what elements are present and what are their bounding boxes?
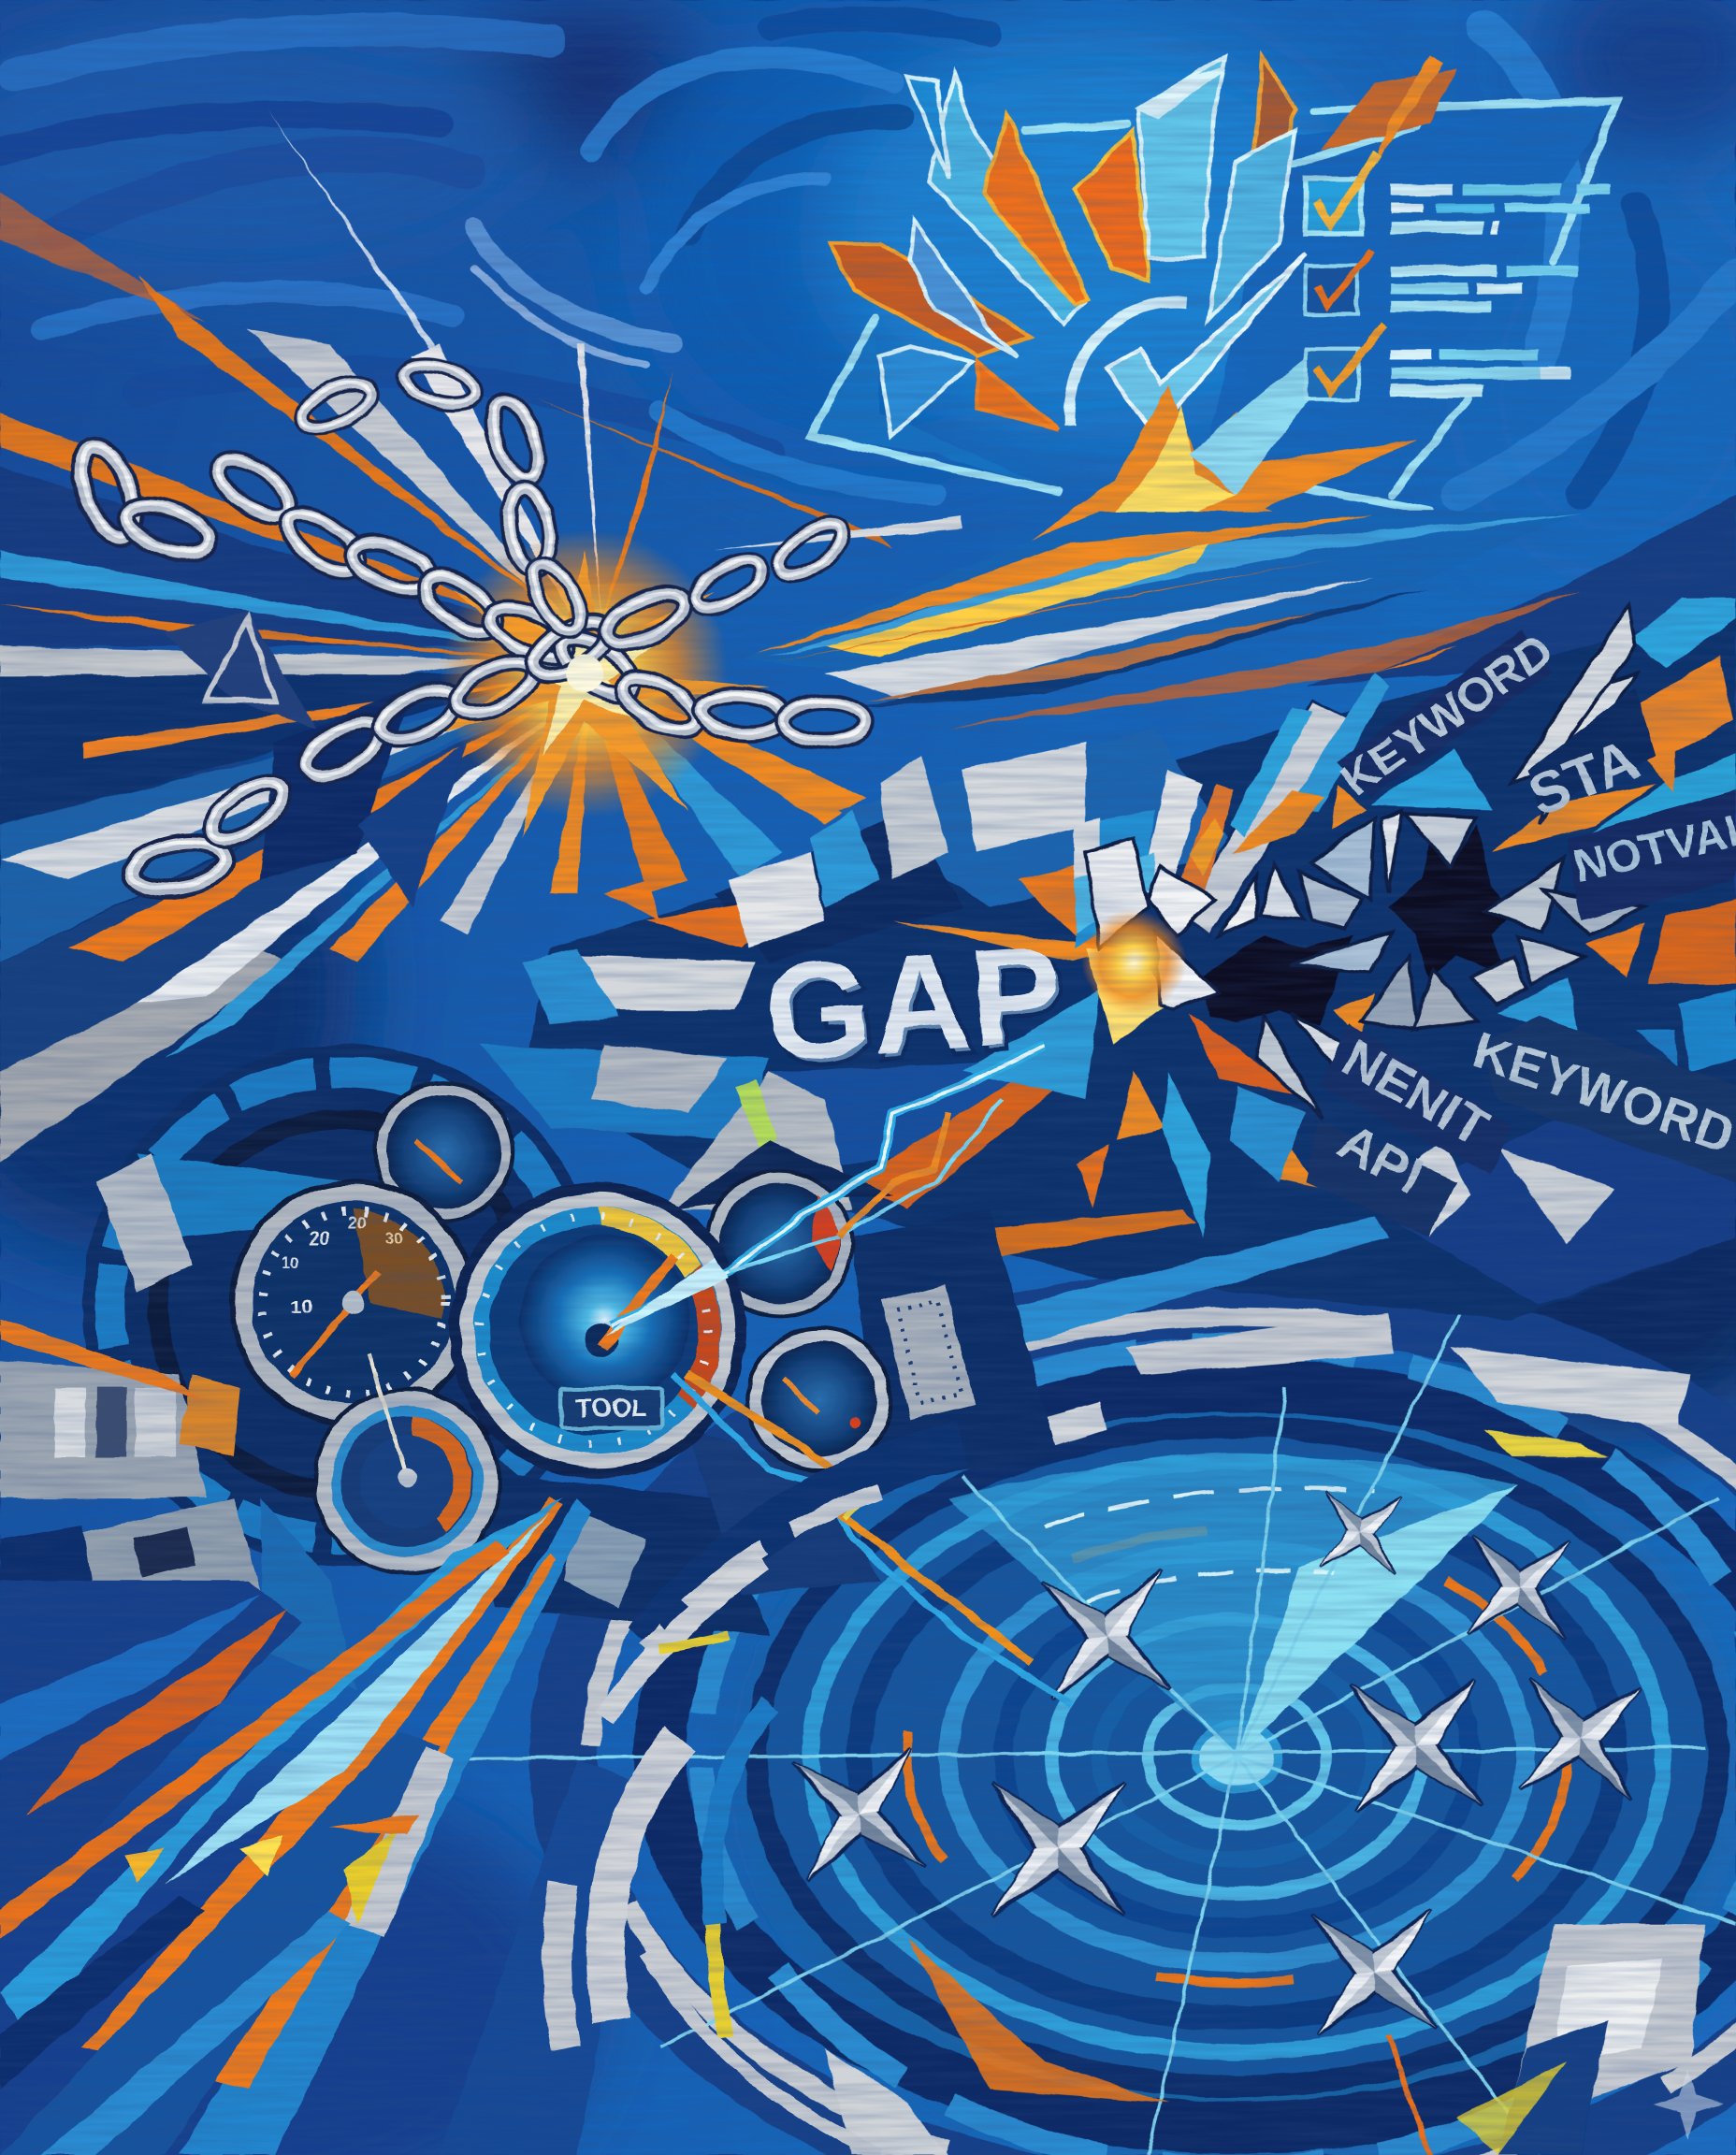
gauge: central TOOL speedometer [450, 1182, 746, 1479]
left radiating streaks [0, 110, 962, 1162]
radar outer rings [564, 1303, 1736, 2155]
lower left light rays [0, 1498, 646, 2155]
explosion glow at chain break [412, 529, 770, 838]
banner: keyword upper: KEYWORD [1331, 624, 1561, 806]
shuriken 3 [1421, 1490, 1616, 1685]
lightning from gauge to gap [605, 1045, 1072, 1704]
gauge: left large: 30 [384, 1229, 403, 1248]
banner: STA [1520, 687, 1656, 829]
shuriken 1 [1284, 1455, 1438, 1609]
mid shatter band base [481, 605, 1736, 1353]
banner: API: API [1328, 1111, 1433, 1206]
burst at clipboard base [1017, 357, 1417, 550]
banner: NOTVAL [1567, 790, 1736, 920]
black holes [1203, 825, 1513, 1025]
banner: API [1306, 1111, 1457, 1237]
curved gray bands around radar [557, 1443, 962, 2155]
GAP lettering: GAP [760, 918, 1067, 1092]
crystal shards [831, 55, 1457, 436]
radar spokes [384, 1292, 1736, 2155]
radar gray arc blocks [825, 1312, 1704, 2155]
chain: upper left to center [69, 438, 866, 741]
arc and large check mark [1069, 253, 1306, 436]
chain: lower left to center [126, 513, 851, 896]
shuriken 5 [1469, 1627, 1692, 1850]
spiky shards radiating upward [1075, 646, 1457, 1045]
radar [384, 1292, 1736, 2155]
gauge: left large: 20 [310, 1229, 329, 1249]
explosion core [565, 654, 603, 693]
checkbox 1 [1306, 154, 1377, 234]
shuriken 8 [1256, 1854, 1494, 2091]
checklist text lines [1391, 184, 1611, 398]
blue and orange fragments [1077, 598, 1736, 1306]
shuriken 7 [925, 1715, 1192, 1981]
shattered glass cluster [1077, 598, 1736, 1306]
chains [69, 357, 866, 896]
checkbox 2 [1306, 250, 1372, 314]
gauge: upper right small [706, 1171, 852, 1317]
gauge: lower right small [747, 1327, 890, 1470]
banner: keyword lower: KEYWORD [1466, 1020, 1736, 1164]
TOOL label: TOOL [575, 1394, 647, 1423]
watermark sparkle [1652, 2068, 1724, 2140]
shuriken 6 [741, 1696, 977, 1932]
TOOL label [561, 1388, 662, 1428]
GAP lettering: GAP [764, 922, 1072, 1096]
dashboard mechanical surround [0, 1045, 1059, 1704]
shuriken 4 [1290, 1620, 1541, 1872]
checkbox 3 [1306, 325, 1385, 398]
banner: STA: STA [1520, 727, 1647, 829]
gauge: left large: 10 [282, 1253, 300, 1272]
gauge: left large: 10 [292, 1295, 312, 1317]
banner: NENIT: NENIT [1334, 1028, 1498, 1157]
gauge: left large: 20 [348, 1212, 367, 1231]
radar sweep wedge [948, 1456, 1519, 1757]
gauge: left large [232, 1182, 474, 1424]
clipboard panel outline [811, 99, 1616, 512]
clipboard checklist with crystals [811, 55, 1616, 550]
radar disc rings [756, 1426, 1718, 2087]
glow at gap impact [1082, 910, 1186, 1014]
silver shards [1086, 605, 1644, 1119]
shuriken 2 [988, 1517, 1225, 1754]
gauge: upper small [375, 1083, 513, 1221]
chain: top descending [294, 357, 591, 639]
gauge: lower left [315, 1353, 499, 1573]
light beam sweeping right [743, 495, 1736, 729]
